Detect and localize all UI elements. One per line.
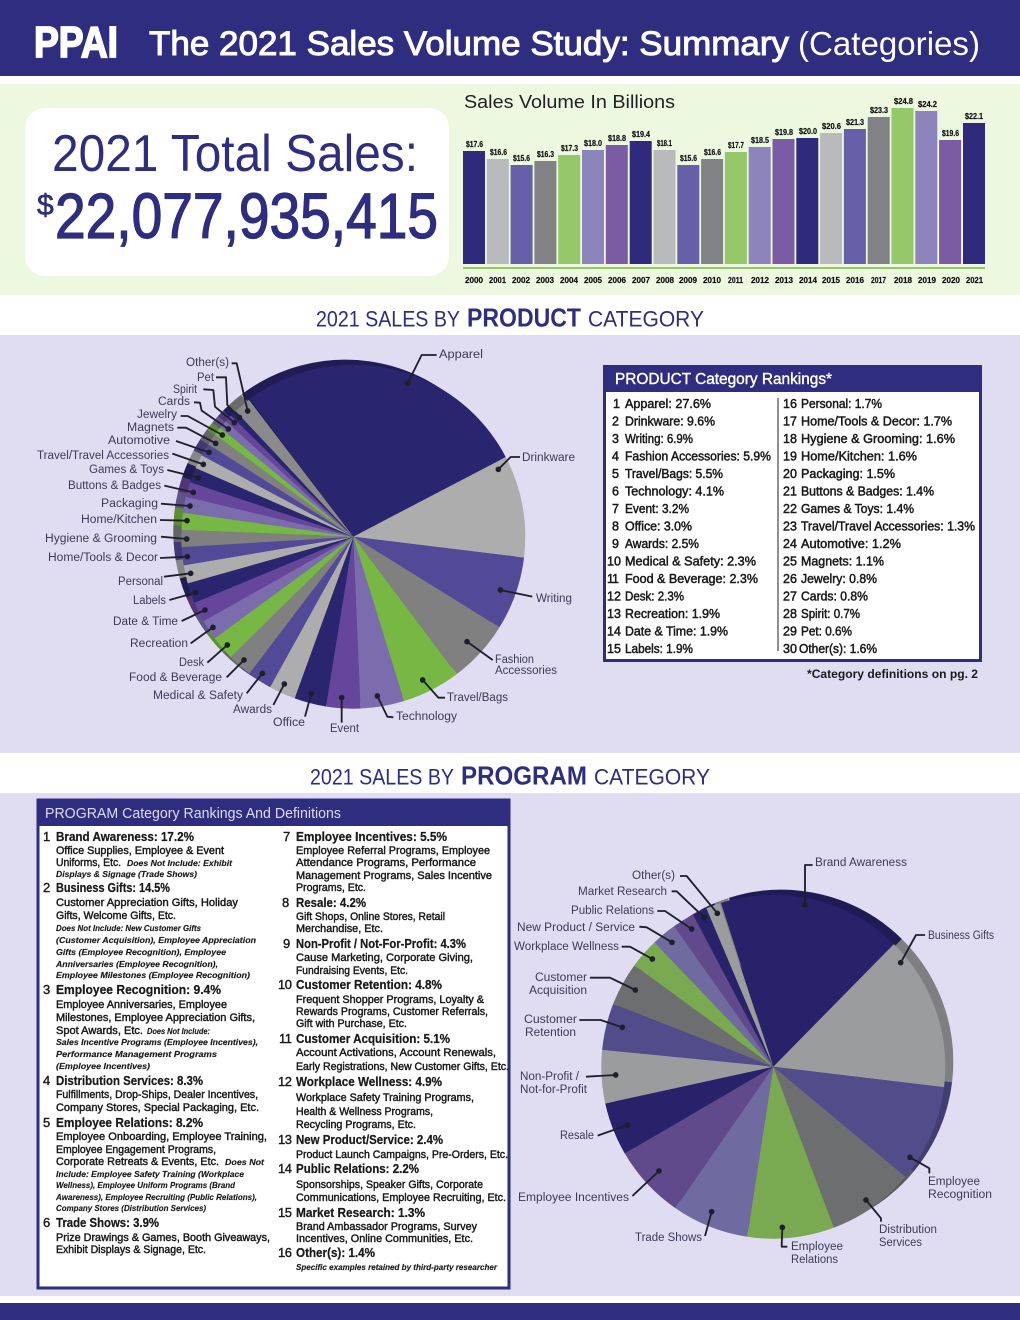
rankings column 2: Cards: 0.8% (801, 590, 868, 604)
definitions column 2: Communications, Employee Recruiting, Etc. (296, 1192, 506, 1204)
pie labels: product: Accessories (495, 665, 557, 677)
rankings column 1: 6 (612, 484, 619, 498)
bar chart: sales volume in billions: 2008 (656, 276, 675, 285)
definitions column 1: Employee Relations: 8.2% (56, 1115, 203, 1130)
pie labels: program: Recognition (928, 1189, 992, 1201)
definitions column 2 (278, 829, 509, 1272)
bar chart: sales volume in billions: 2005 (584, 276, 603, 285)
rankings column 2: Games & Toys: 1.4% (801, 502, 914, 516)
definitions column 2: Health & Wellness Programs, (296, 1106, 433, 1118)
definitions column 2: Workplace Safety Training Programs, (296, 1092, 474, 1104)
definitions column 2: 11 (279, 1031, 292, 1046)
rankings column 1: 4 (612, 450, 619, 464)
definitions column 2: Fundraising Events, Etc. (296, 965, 408, 977)
definitions column 1: Distribution Services: 8.3% (56, 1073, 203, 1088)
rankings column 2: 21 (783, 484, 797, 498)
bar chart: sales volume in billions: $19.4 (632, 130, 650, 139)
rankings column 2: 29 (783, 624, 797, 638)
pie labels: product: Food & Beverage (129, 672, 222, 684)
definitions column 1: (Employee Incentives) (56, 1061, 150, 1071)
rankings column 2: Magnets: 1.1% (801, 554, 884, 568)
definitions column 1: Does Not (225, 1157, 265, 1167)
definitions column 1 (43, 829, 270, 1256)
rankings column 2: 22 (783, 502, 797, 516)
rankings column 1: Travel/Bags: 5.5% (625, 467, 723, 481)
rankings column 2: 28 (783, 607, 797, 621)
panel: product category (0, 335, 1020, 753)
pie chart: product categories (173, 360, 517, 704)
pie labels: product: Drinkware (522, 452, 575, 464)
pie labels: program: Customer (535, 972, 587, 984)
definitions column 1: Fulfillments, Drop-Ships, Dealer Incentives, (56, 1089, 258, 1101)
footer band (0, 1303, 1020, 1320)
definitions column 2: 10 (278, 977, 292, 992)
definitions column 2: 15 (278, 1205, 292, 1220)
bar chart: sales volume in billions: 2007 (632, 276, 651, 285)
pie labels: program: Market Research (578, 886, 667, 898)
definitions column 1: (Customer Acquisition), Employee Appreciation (56, 935, 256, 945)
heading: sales by product category: CATEGORY (588, 306, 704, 332)
bar chart: sales volume in billions: 2009 (679, 276, 698, 285)
definitions column 2: Non-Profit / Not-For-Profit: 4.3% (296, 936, 466, 951)
definitions column 1: Employee Recognition: 9.4% (56, 982, 221, 997)
rankings column 1: Technology: 4.1% (625, 484, 724, 498)
pie labels: product: Awards (233, 704, 272, 716)
definitions column 1: Milestones, Employee Appreciation Gifts, (56, 1012, 255, 1024)
heading: sales by program category: 2021 SALES BY (310, 764, 454, 790)
rankings column 1: Date & Time: 1.9% (625, 624, 728, 638)
definitions column 1: Performance Management Programs (56, 1049, 217, 1059)
bar chart: sales volume in billions: 2021 (966, 276, 984, 285)
rankings column 1: Apparel: 27.6% (625, 397, 711, 411)
bar chart: sales volume in billions: $24.2 (918, 100, 938, 109)
bar chart: sales volume in billions: $23.3 (870, 106, 888, 115)
definitions column 2: Product Launch Campaigns, Pre-Orders, Etc. (296, 1149, 508, 1161)
definitions column 1: 2 (43, 880, 50, 895)
definitions column 2: 7 (283, 829, 290, 844)
bar chart: sales volume in billions: $21.3 (846, 118, 864, 127)
header banner (0, 0, 1020, 76)
definitions column 2: Customer Retention: 4.8% (296, 977, 442, 992)
bar chart: sales volume in billions: 2004 (560, 276, 579, 285)
definitions column 1: Employee Milestones (Employee Recognition) (56, 970, 250, 980)
rankings column 2: 19 (783, 450, 797, 464)
definitions column 1: Does Not Include: Exhibit (127, 858, 233, 868)
pie labels: program: Acquisition (529, 985, 587, 997)
pie labels: product: Home/Tools & Decor (48, 552, 158, 564)
rankings heading: PROGRAM Category Rankings And Definitions (45, 805, 341, 822)
bar chart: sales volume in billions: 2011 (728, 276, 743, 285)
pie labels: product: Other(s) (186, 357, 229, 369)
heading: sales by program category: CATEGORY (594, 764, 710, 790)
pie labels: program: Employee (791, 1241, 843, 1253)
bar chart: sales volume in billions: $16.3 (537, 150, 554, 159)
pie labels: program: Not-for-Profit (520, 1084, 588, 1096)
definitions column 1: Awareness), Employee Recruiting (Public Relations), (55, 1192, 257, 1202)
definitions column 1: 1 (43, 829, 50, 844)
footnote: category definitions: *Category definitions on pg. 2 (807, 667, 978, 681)
definitions column 1: Uniforms, Etc. (56, 857, 121, 869)
pie labels: product: Personal (118, 576, 163, 588)
rankings column 2 (783, 397, 975, 656)
pie labels: product: Date & Time (113, 616, 178, 628)
rankings column 1: 10 (607, 554, 621, 568)
definitions column 2: Employee Incentives: 5.5% (296, 829, 447, 844)
definitions column 1: Does Not Include: New Customer Gifts (56, 923, 201, 933)
definitions column 1: Anniversaries (Employee Recognition), (55, 959, 218, 969)
definitions column 2: 13 (278, 1132, 292, 1147)
definitions column 2: Public Relations: 2.2% (296, 1161, 419, 1176)
definitions column 1: Include: Employee Safety Training (Workplace (56, 1169, 244, 1179)
pie labels: product: Buttons & Badges (68, 480, 161, 492)
definitions column 1: 6 (43, 1215, 50, 1230)
bar chart: sales volume in billions: 2006 (608, 276, 627, 285)
definitions column 1: Wellness), Employee Uniform Programs (Brand (56, 1180, 236, 1190)
bar chart: sales volume in billions: 2020 (942, 276, 961, 285)
bar chart: sales volume in billions: $18.1 (657, 139, 672, 148)
definitions column 2: Cause Marketing, Corporate Giving, (296, 952, 473, 964)
rankings column 2: Personal: 1.7% (801, 397, 882, 411)
total sales card: 22,077,935,415 (55, 180, 438, 252)
definitions column 2: Customer Acquisition: 5.1% (296, 1031, 450, 1046)
bar chart: sales volume in billions: $15.6 (513, 154, 530, 163)
bar chart: sales volume in billions: 2018 (894, 276, 913, 285)
rankings column 1: Medical & Safety: 2.3% (625, 554, 756, 568)
bar chart: sales volume in billions: $22.1 (965, 112, 983, 121)
rankings column 1: 3 (612, 432, 619, 446)
pie labels: product: Fashion (495, 654, 534, 666)
definitions column 2: Market Research: 1.3% (296, 1205, 425, 1220)
total sales card: 2021 Total Sales: (52, 125, 418, 183)
bar chart: sales volume in billions: 2017 (871, 276, 886, 285)
pie labels: program: Relations (791, 1254, 838, 1266)
definitions column 2: Gift with Purchase, Etc. (296, 1018, 407, 1030)
bar chart: sales volume in billions: 2016 (846, 276, 865, 285)
definitions column 1: Employee Anniversaries, Employee (56, 999, 227, 1011)
rankings column 2: Jewelry: 0.8% (801, 572, 877, 586)
definitions column 1: Spot Awards, Etc. (56, 1025, 143, 1037)
pie labels: program: Non-Profit / (520, 1071, 580, 1083)
pie labels: product: Pet (197, 372, 215, 384)
rankings column 2: Other(s): 1.6% (799, 642, 877, 656)
panel: total sales and sales volume (0, 84, 1020, 295)
rankings column 1: 14 (607, 624, 621, 638)
pie labels: product: Hygiene & Grooming (45, 533, 157, 545)
rankings column 2: 18 (783, 432, 797, 446)
definitions column 1: Sales Incentive Programs (Employee Incentives), (56, 1037, 258, 1047)
pie labels: product: Labels (133, 595, 166, 607)
rankings heading: PRODUCT Category Rankings* (615, 371, 832, 388)
bar chart: sales volume in billions: 2019 (918, 276, 937, 285)
rankings column 1: Food & Beverage: 2.3% (625, 572, 758, 586)
pie labels: program: Business Gifts (928, 930, 994, 942)
rankings column 1: 2 (612, 414, 619, 428)
title: The 2021 Sales Volume Study: Summary (149, 25, 789, 63)
definitions column 2: Attendance Programs, Performance (296, 857, 476, 869)
PPAI logo: PPAI (34, 18, 118, 67)
rankings column 2: 25 (783, 554, 797, 568)
bar chart: sales volume in billions: $15.6 (680, 154, 697, 163)
rankings column 1: Awards: 2.5% (625, 537, 699, 551)
bar chart: sales volume in billions: $19.6 (942, 129, 959, 138)
definitions column 1: Employee Engagement Programs, (56, 1144, 216, 1156)
definitions column 1: Office Supplies, Employee & Event (56, 845, 224, 857)
pie labels: program (514, 857, 994, 1266)
definitions column 2: 12 (278, 1074, 292, 1089)
definitions column 1: Company Stores, Special Packaging, Etc. (56, 1102, 259, 1114)
pie labels: product (37, 349, 575, 735)
definitions column 2: Employee Referral Programs, Employee (296, 845, 490, 857)
rankings column 1: 8 (612, 520, 619, 534)
bar chart: sales volume in billions: $17.3 (561, 144, 578, 153)
pie labels: product: Travel/Travel Accessories (37, 450, 169, 462)
definitions column 2: Specific examples retained by third-party researcher (296, 1262, 498, 1272)
pie labels: program: Trade Shows (635, 1232, 702, 1244)
pie labels: product: Technology (396, 711, 457, 723)
pie labels: product: Apparel (439, 349, 483, 361)
heading: sales by product category: 2021 SALES BY (316, 306, 460, 332)
definitions column 2: Recycling Programs, Etc. (296, 1119, 416, 1131)
rankings column 2: 26 (783, 572, 797, 586)
pie labels: program: Other(s) (632, 870, 675, 882)
pie labels: product: Magnets (127, 422, 174, 434)
rankings column 1: Fashion Accessories: 5.9% (625, 450, 771, 464)
bar chart: sales volume in billions: $24.8 (894, 97, 914, 106)
definitions column 2: Gift Shops, Online Stores, Retail (296, 911, 445, 923)
bar chart: sales volume in billions: 2002 (512, 276, 531, 285)
definitions column 1: Exhibit Displays & Signage, Etc. (56, 1244, 206, 1256)
definitions column 2: Management Programs, Sales Incentive (296, 870, 492, 882)
rankings column 1 (607, 397, 771, 656)
bar chart: sales volume in billions: $16.6 (704, 148, 721, 157)
bar chart: sales volume in billions: 2010 (703, 276, 722, 285)
rankings column 2: 27 (783, 590, 797, 604)
definitions column 2: Other(s): 1.4% (296, 1245, 375, 1260)
rankings column 2: Buttons & Badges: 1.4% (801, 484, 934, 498)
rankings column 2: Travel/Travel Accessories: 1.3% (801, 520, 975, 534)
bar chart: sales volume in billions: $18.0 (584, 139, 602, 148)
rankings column 1: 15 (607, 642, 621, 656)
pie labels: program: Retention (525, 1027, 576, 1039)
rankings column 1: Writing: 6.9% (625, 432, 693, 446)
rankings column 1: Desk: 2.3% (625, 590, 684, 604)
definitions column 2: Sponsorships, Speaker Gifts, Corporate (296, 1179, 483, 1191)
bar chart: sales volume in billions (463, 92, 985, 285)
rankings column 1: Office: 3.0% (625, 520, 692, 534)
definitions column 2: 8 (282, 895, 289, 910)
definitions column 2: 16 (278, 1245, 292, 1260)
bar chart: sales volume in billions: $19.8 (775, 128, 793, 137)
pie labels: product: Medical & Safety (153, 690, 243, 702)
definitions column 2: 9 (283, 936, 290, 951)
rankings column 2: 30 (783, 642, 797, 656)
pie labels: program: Distribution (879, 1224, 937, 1236)
pie labels: product: Games & Toys (89, 464, 164, 476)
bar chart: sales volume in billions: 2012 (751, 276, 770, 285)
rankings column 1: Recreation: 1.9% (625, 607, 720, 621)
pie labels: product: Packaging (101, 498, 158, 510)
pie labels: product: Recreation (130, 638, 188, 650)
rankings column 1: Labels: 1.9% (625, 642, 693, 656)
definitions column 2: Account Activations, Account Renewals, (296, 1047, 496, 1059)
chart title: Sales Volume In Billions (464, 92, 675, 112)
pie labels: program: Resale (560, 1130, 594, 1142)
bar chart: sales volume in billions: $20.0 (799, 127, 817, 136)
definitions column 1: Company Stores (Distribution Services) (56, 1203, 206, 1213)
heading: sales by product category: PRODUCT (467, 302, 581, 332)
definitions column 1: Trade Shows: 3.9% (56, 1215, 159, 1230)
definitions column 2: Frequent Shopper Programs, Loyalty & (296, 994, 485, 1006)
rankings column 2: Packaging: 1.5% (801, 467, 895, 481)
definitions column 2: Merchandise, Etc. (296, 923, 383, 935)
pie labels: program: Brand Awareness (815, 857, 907, 869)
bar chart: sales volume in billions: 2014 (799, 276, 818, 285)
definitions column 1: Prize Drawings & Games, Booth Giveaways, (56, 1232, 270, 1244)
definitions column 2: Rewards Programs, Customer Referrals, (296, 1006, 488, 1018)
definitions column 2: Programs, Etc. (296, 882, 366, 894)
pie labels: product: Jewelry (137, 409, 177, 421)
pie labels: product: Desk (179, 657, 204, 669)
rankings column 1: Event: 3.2% (625, 502, 689, 516)
definitions column 1: Does Not Include: (147, 1026, 210, 1036)
definitions column 2: New Product/Service: 2.4% (296, 1132, 443, 1147)
pie labels: product: Office (273, 717, 305, 729)
definitions column 1: Brand Awareness: 17.2% (56, 829, 194, 844)
pie labels: product: Writing (536, 593, 572, 605)
definitions column 1: 5 (43, 1115, 50, 1130)
bar chart: sales volume in billions: $17.6 (466, 140, 483, 149)
pie labels: program: Public Relations (571, 905, 654, 917)
definitions column 2: 14 (278, 1161, 292, 1176)
rankings column 2: 24 (783, 537, 797, 551)
bar chart: sales volume in billions: $20.6 (822, 122, 842, 131)
bar chart: sales volume in billions: $17.7 (728, 141, 744, 150)
definitions column 1: Employee Onboarding, Employee Training, (56, 1131, 267, 1143)
pie labels: program: Workplace Wellness (514, 941, 619, 953)
title qualifier: (Categories) (798, 25, 980, 62)
bar chart: sales volume in billions: 2000 (465, 276, 484, 285)
heading: sales by program category (310, 760, 710, 790)
bar chart: sales volume in billions: 2013 (775, 276, 794, 285)
total sales card (25, 108, 449, 276)
pie labels: product: Event (330, 723, 360, 735)
definitions column 2: Workplace Wellness: 4.9% (296, 1074, 442, 1089)
rankings column 2: Home/Tools & Decor: 1.7% (801, 414, 952, 428)
pie leader lines: program (579, 865, 929, 1247)
definitions column 1: Customer Appreciation Gifts, Holiday (56, 897, 238, 909)
heading: sales by program category: PROGRAM (461, 760, 587, 790)
definitions column 1: 4 (43, 1073, 50, 1088)
panel: product category rankings (604, 366, 981, 660)
pie labels: program: Employee (928, 1176, 980, 1188)
pie labels: program: Services (879, 1237, 922, 1249)
definitions column 2: Resale: 4.2% (296, 895, 366, 910)
bar chart: sales volume in billions: 2015 (822, 276, 841, 285)
rankings column 2: 17 (783, 414, 797, 428)
pie labels: product: Home/Kitchen (81, 514, 157, 526)
definitions column 2: Early Registrations, New Customer Gifts, Etc. (296, 1061, 509, 1073)
pie labels: program: New Product / Service (517, 922, 635, 934)
bar chart: sales volume in billions: 2003 (536, 276, 555, 285)
pie labels: program: Customer (524, 1014, 577, 1026)
rankings column 2: 20 (783, 467, 797, 481)
pie labels: product: Spirit (173, 384, 198, 396)
definitions column 2: Brand Ambassador Programs, Survey (296, 1221, 477, 1233)
rankings column 1: 13 (607, 607, 621, 621)
definitions column 1: Gifts (Employee Recognition), Employee (56, 947, 226, 957)
rankings column 1: 11 (607, 572, 619, 586)
bar chart: sales volume in billions: $18.5 (751, 136, 769, 145)
bar chart: sales volume in billions: 2001 (489, 276, 507, 285)
pie labels: product: Automotive (108, 435, 170, 447)
rankings column 1: 9 (612, 537, 619, 551)
pie labels: product: Cards (158, 396, 190, 408)
rankings column 2: Automotive: 1.2% (801, 537, 901, 551)
rankings column 1: 5 (612, 467, 619, 481)
panel: program rankings and definitions (38, 800, 509, 1288)
definitions column 1: Corporate Retreats & Events, Etc. (56, 1156, 219, 1168)
pie labels: program: Employee Incentives (518, 1192, 629, 1204)
bar chart: sales volume in billions: $16.6 (490, 148, 507, 157)
rankings column 1: 12 (607, 590, 621, 604)
rankings column 2: 16 (783, 397, 797, 411)
rankings column 2: Spirit: 0.7% (801, 607, 860, 621)
rankings column 2: Home/Kitchen: 1.6% (801, 450, 917, 464)
pie chart: program categories (609, 890, 953, 1234)
total sales card: $ (37, 189, 54, 222)
rankings column 2: 23 (783, 520, 797, 534)
bar chart: sales volume in billions: $18.8 (608, 134, 626, 143)
heading: sales by product category (316, 302, 704, 332)
pie labels: product: Travel/Bags (447, 692, 508, 704)
rankings column 2: Hygiene & Grooming: 1.6% (801, 432, 955, 446)
panel: program category (0, 793, 1020, 1296)
pie leader lines: product (160, 355, 532, 723)
definitions column 2: Incentives, Online Communities, Etc. (296, 1233, 473, 1245)
definitions column 1: Business Gifts: 14.5% (56, 880, 170, 895)
definitions column 1: Gifts, Welcome Gifts, Etc. (56, 910, 176, 922)
rankings column 1: Drinkware: 9.6% (625, 414, 715, 428)
definitions column 1: Displays & Signage (Trade Shows) (56, 869, 197, 879)
rankings column 1: 1 (613, 397, 620, 411)
rankings column 1: 7 (612, 502, 619, 516)
rankings column 2: Pet: 0.6% (801, 624, 852, 638)
definitions column 1: 3 (43, 982, 50, 997)
